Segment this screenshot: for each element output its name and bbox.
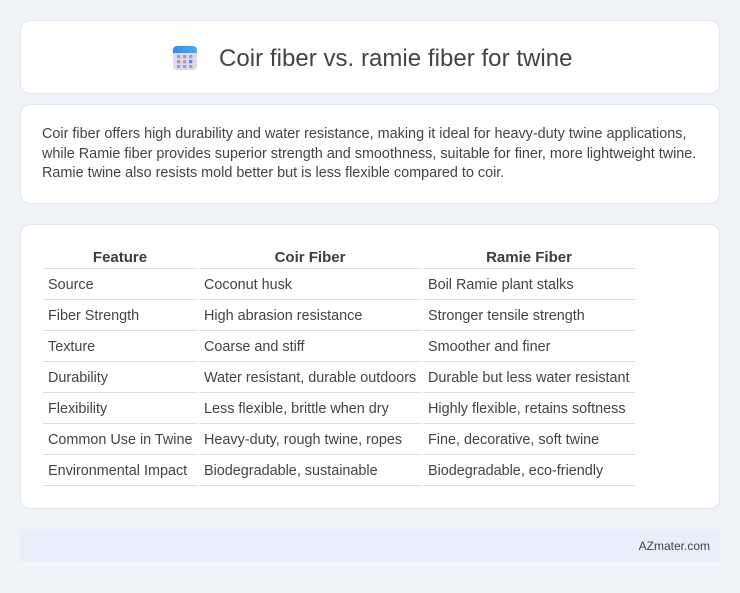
table rows: Durable but less water resistant bbox=[428, 370, 630, 386]
table rows: Environmental Impact bbox=[48, 463, 187, 479]
table rows: Boil Ramie plant stalks bbox=[428, 277, 574, 293]
summary text bbox=[42, 126, 696, 181]
table rows: Smoother and finer bbox=[428, 339, 550, 355]
panel: comparison table bbox=[20, 224, 720, 509]
title: Coir fiber vs. ramie fiber for twine bbox=[219, 45, 573, 72]
table rows: Fiber Strength bbox=[48, 308, 139, 324]
table rows: Heavy-duty, rough twine, ropes bbox=[204, 432, 402, 448]
footer source text: AZmater.com bbox=[639, 539, 710, 553]
table rows: Common Use in Twine bbox=[48, 432, 192, 448]
table rows: Fine, decorative, soft twine bbox=[428, 432, 599, 448]
table rows: Coarse and stiff bbox=[204, 339, 305, 355]
footer bar bbox=[20, 529, 720, 562]
table rows bbox=[43, 268, 635, 486]
table rows: Flexibility bbox=[48, 401, 107, 417]
table rows: Biodegradable, eco-friendly bbox=[428, 463, 603, 479]
table rows: Highly flexible, retains softness bbox=[428, 401, 626, 417]
summary text: Coir fiber offers high durability and water resistance, making it ideal for heavy-duty twine applications, bbox=[42, 126, 686, 142]
panel: summary bbox=[20, 104, 720, 204]
table rows: Biodegradable, sustainable bbox=[204, 463, 378, 479]
table rows: Source bbox=[48, 277, 94, 293]
table header: Ramie Fiber bbox=[486, 249, 572, 266]
icon: calendar grid bbox=[173, 46, 197, 70]
table rows: Durability bbox=[48, 370, 108, 386]
table header: Feature bbox=[93, 249, 147, 266]
table rows: Coconut husk bbox=[204, 277, 292, 293]
table rows: High abrasion resistance bbox=[204, 308, 362, 324]
table header bbox=[93, 249, 572, 266]
table rows: Water resistant, durable outdoors bbox=[204, 370, 416, 386]
summary text: Ramie twine also resists mold better but is less flexible compared to coir. bbox=[42, 165, 504, 181]
table header: Coir Fiber bbox=[275, 249, 345, 266]
table rows: Stronger tensile strength bbox=[428, 308, 585, 324]
table rows: Texture bbox=[48, 339, 95, 355]
summary text: while Ramie fiber provides superior strength and smoothness, suitable for finer, more lightweight twine. bbox=[42, 146, 696, 162]
panel: title header bbox=[20, 20, 720, 94]
table rows: Less flexible, brittle when dry bbox=[204, 401, 389, 417]
